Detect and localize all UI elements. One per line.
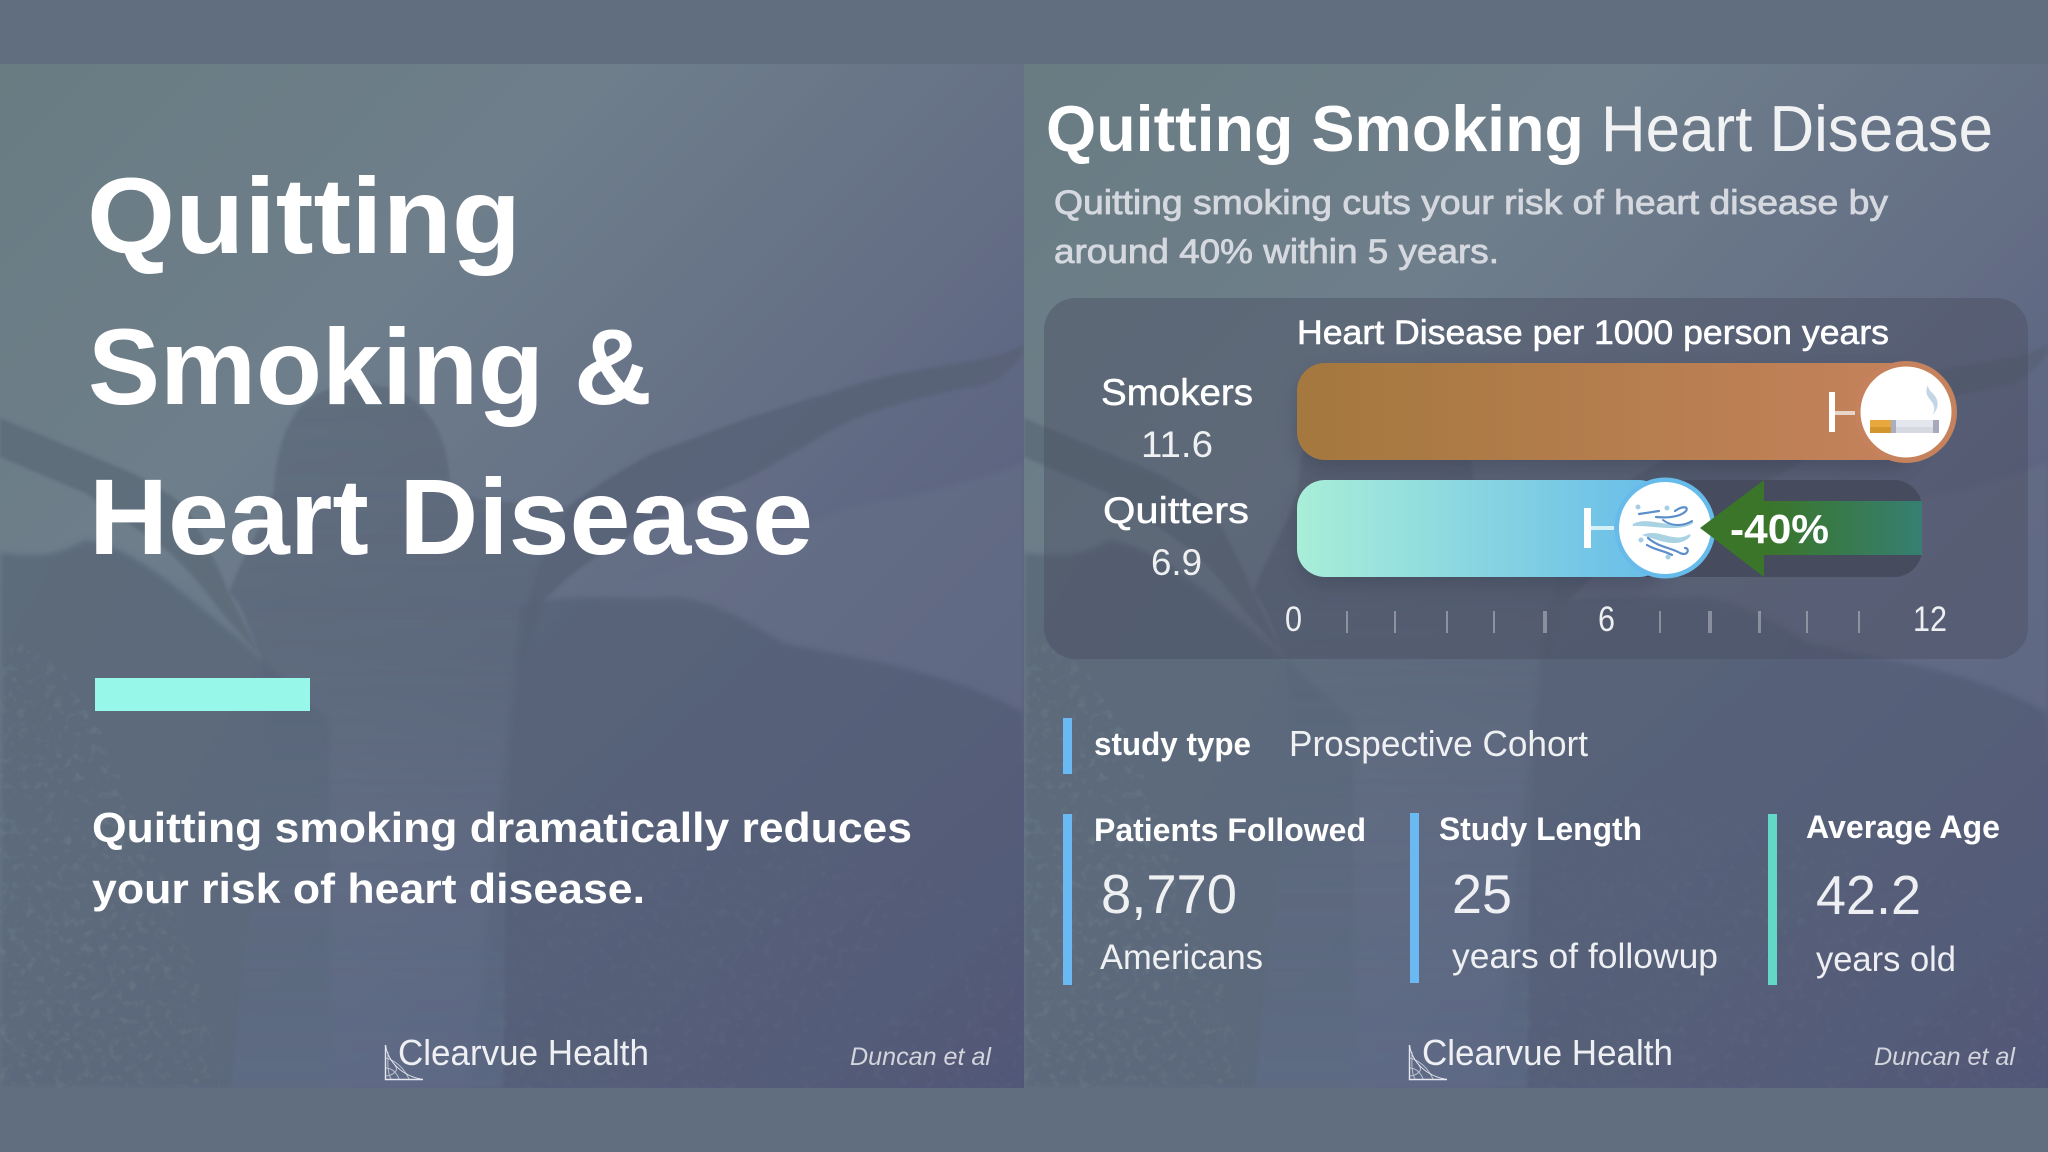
axis: 12	[1913, 600, 1947, 639]
stat: study length	[1410, 811, 1718, 983]
stat: study length: 25	[1452, 863, 1512, 925]
row label: quitters: 6.9	[1151, 542, 1202, 583]
key finding text: Quitting smoking cuts your risk of heart disease by	[1054, 184, 1888, 222]
title: Quitting	[87, 155, 521, 276]
brand logo: Clearvue Health: Clearvue Health	[1422, 1032, 1673, 1073]
arrow: -40% reduction: -40%	[1730, 506, 1829, 552]
title	[87, 155, 813, 577]
bar: smokers 11.6	[1297, 361, 1957, 469]
stat: patients followed: Americans	[1100, 938, 1263, 977]
icon: cigarette	[1870, 385, 1939, 433]
heading	[1046, 92, 1993, 165]
accent bar	[95, 678, 310, 711]
study type row	[1063, 718, 1588, 774]
heading: Quitting Smoking	[1046, 92, 1584, 165]
stat: patients followed: 8,770	[1101, 863, 1237, 925]
citation: Duncan et al	[1874, 1043, 2016, 1071]
citation: Duncan et al	[850, 1043, 992, 1071]
row label: smokers	[1101, 372, 1253, 465]
row label: smokers: 11.6	[1141, 424, 1213, 465]
brand logo: Clearvue Health: Clearvue Health	[398, 1032, 649, 1073]
bar: quitters 6.9 with track	[1297, 478, 1922, 586]
panel: right data card	[1024, 64, 2048, 1088]
stat: average age: 42.2	[1816, 864, 1921, 926]
stat: study length: years of followup	[1452, 937, 1718, 976]
title: Smoking &	[88, 306, 652, 427]
stat: patients followed: Patients Followed	[1094, 812, 1366, 848]
axis: 0	[1285, 600, 1302, 639]
stat: average age: Average Age	[1806, 809, 2000, 845]
row label: quitters	[1103, 490, 1249, 583]
key finding text	[1054, 184, 1888, 271]
panel: left title card	[0, 64, 1024, 1088]
axis	[1285, 600, 1947, 639]
arrow: -40% reduction	[1700, 480, 1922, 577]
stat: average age	[1768, 809, 2000, 985]
summary text	[92, 804, 912, 912]
study type row: Prospective Cohort	[1289, 723, 1588, 764]
study type row: study type	[1094, 726, 1251, 762]
summary text: Quitting smoking dramatically reduces	[92, 804, 912, 851]
key finding text: around 40% within 5 years.	[1054, 233, 1499, 271]
icon: wind	[1633, 507, 1693, 557]
stat: patients followed	[1063, 812, 1366, 985]
row label: smokers: Smokers	[1101, 372, 1253, 413]
summary text: your risk of heart disease.	[92, 865, 645, 912]
title: Heart Disease	[89, 456, 813, 577]
chart panel	[1044, 298, 2028, 659]
stat: study length: Study Length	[1439, 811, 1642, 847]
heading: Heart Disease	[1601, 92, 1993, 165]
stat: average age: years old	[1816, 940, 1956, 979]
row label: quitters: Quitters	[1103, 490, 1249, 531]
axis: 6	[1598, 600, 1615, 639]
chart title: Heart Disease per 1000 person years	[1297, 314, 1889, 352]
